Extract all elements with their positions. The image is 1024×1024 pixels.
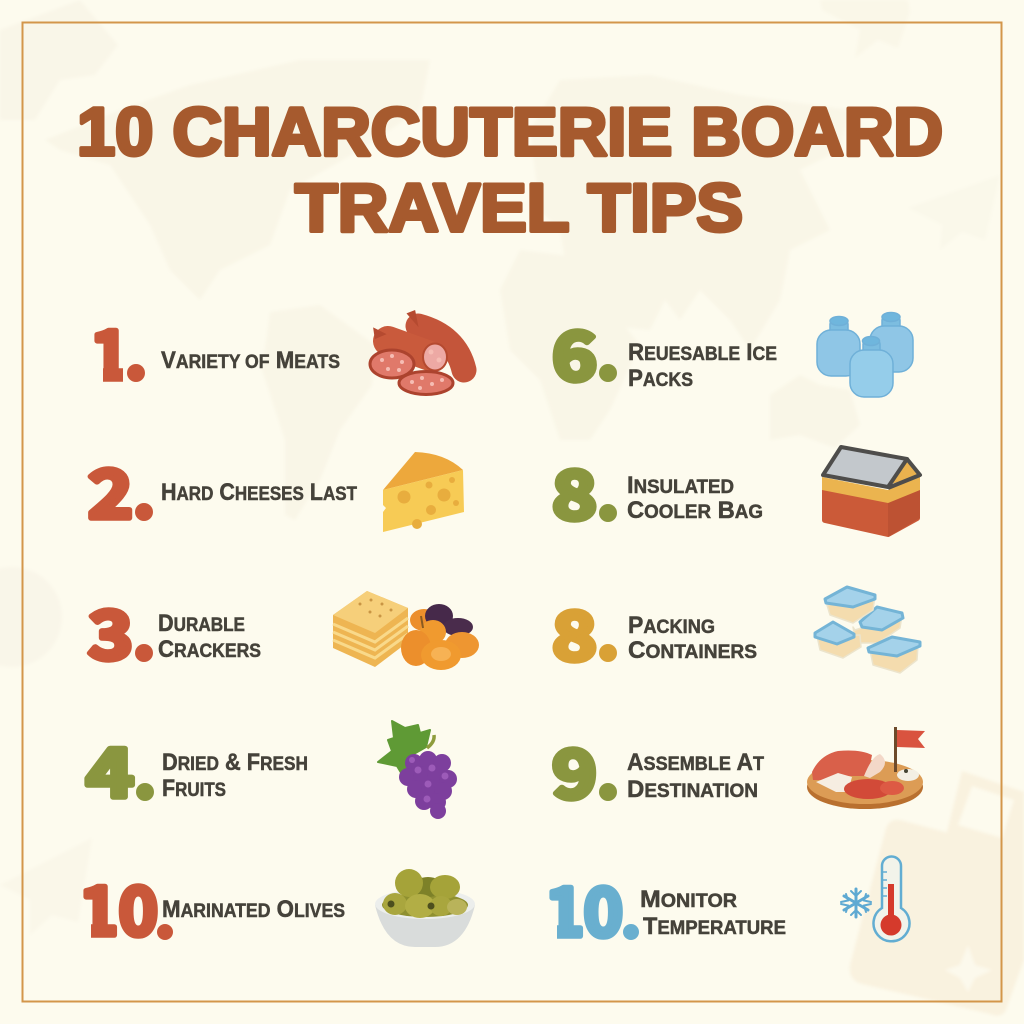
icon: ice pack bottles (817, 312, 913, 397)
label (627, 749, 764, 803)
number 8: 8 (552, 583, 597, 680)
number 9 (552, 721, 617, 818)
tip 3: durable crackers (88, 582, 479, 679)
number 10: 10 (79, 858, 158, 955)
icon: snowflake (841, 889, 871, 917)
label: VARIETY OF MEATS (161, 347, 340, 374)
label (628, 612, 757, 664)
tip 1: variety of meats (90, 302, 464, 399)
title: TRAVEL TIPS (295, 170, 743, 246)
number 6 (552, 303, 617, 400)
number 10 (549, 884, 639, 940)
label (628, 339, 777, 392)
label: PACKS (628, 365, 693, 392)
label (640, 886, 786, 940)
number 3 (88, 582, 153, 679)
tip 2: hard cheeses (88, 441, 464, 538)
number 2: 2 (88, 441, 133, 538)
number 8 (552, 583, 617, 680)
label: CRACKERS (158, 636, 261, 663)
label: HARD CHEESES LAST (161, 479, 357, 506)
tip 8: packing containers (552, 583, 920, 680)
icon: thermometer (874, 856, 909, 941)
label: ASSEMBLE AT (627, 749, 764, 776)
label: DURABLE (158, 610, 245, 637)
icon: bowl of olives (375, 869, 475, 947)
label: MONITOR (640, 886, 737, 913)
icon: sausages and salami slices (370, 312, 464, 394)
icon: grapes (378, 721, 457, 819)
title: 10 CHARCUTERIE BOARD (77, 94, 943, 170)
icon: cooler bag (822, 447, 920, 537)
number 2 (88, 441, 153, 538)
label: TEMPERATURE (643, 913, 786, 940)
label (162, 749, 308, 802)
tip 10: monitor temperature (549, 855, 911, 942)
label: REUESABLE ICE (628, 339, 777, 366)
icon: cheese wedge (383, 452, 464, 532)
label: PACKING (628, 612, 715, 639)
label: CONTAINERS (628, 637, 757, 664)
number 10: 10 (545, 859, 623, 956)
decorative suitcase (850, 771, 1024, 1016)
number 3: 3 (88, 582, 133, 679)
number 4: 4 (86, 720, 134, 817)
number 8 (552, 442, 617, 539)
tip 7: insulated cooler bag (numbered 8) (552, 442, 920, 539)
label: DESTINATION (627, 776, 758, 803)
number 1: 1 (90, 302, 130, 399)
label (158, 610, 261, 663)
number 9: 9 (552, 721, 597, 818)
icon: crackers and dried fruit (333, 591, 479, 670)
tip 6: reusable ice packs (552, 303, 913, 400)
tip 5: marinated olives (numbered 10) (83, 869, 475, 947)
number 1 (94, 328, 145, 382)
tip 9: assemble at destination (552, 721, 925, 818)
tip 4: dried and fresh fruits (86, 720, 457, 819)
label: DRIED & FRESH (162, 749, 308, 776)
title (77, 94, 943, 246)
icon: food containers (815, 587, 920, 673)
label: FRUITS (162, 775, 226, 802)
label: COOLER BAG (627, 497, 763, 524)
number 10 (83, 883, 173, 940)
number 6: 6 (552, 303, 597, 400)
number 8: 8 (552, 442, 597, 539)
label (627, 472, 763, 524)
icon: board with flag (807, 727, 925, 809)
number 4 (86, 720, 154, 817)
label: INSULATED (627, 472, 734, 499)
label: MARINATED OLIVES (162, 896, 345, 923)
